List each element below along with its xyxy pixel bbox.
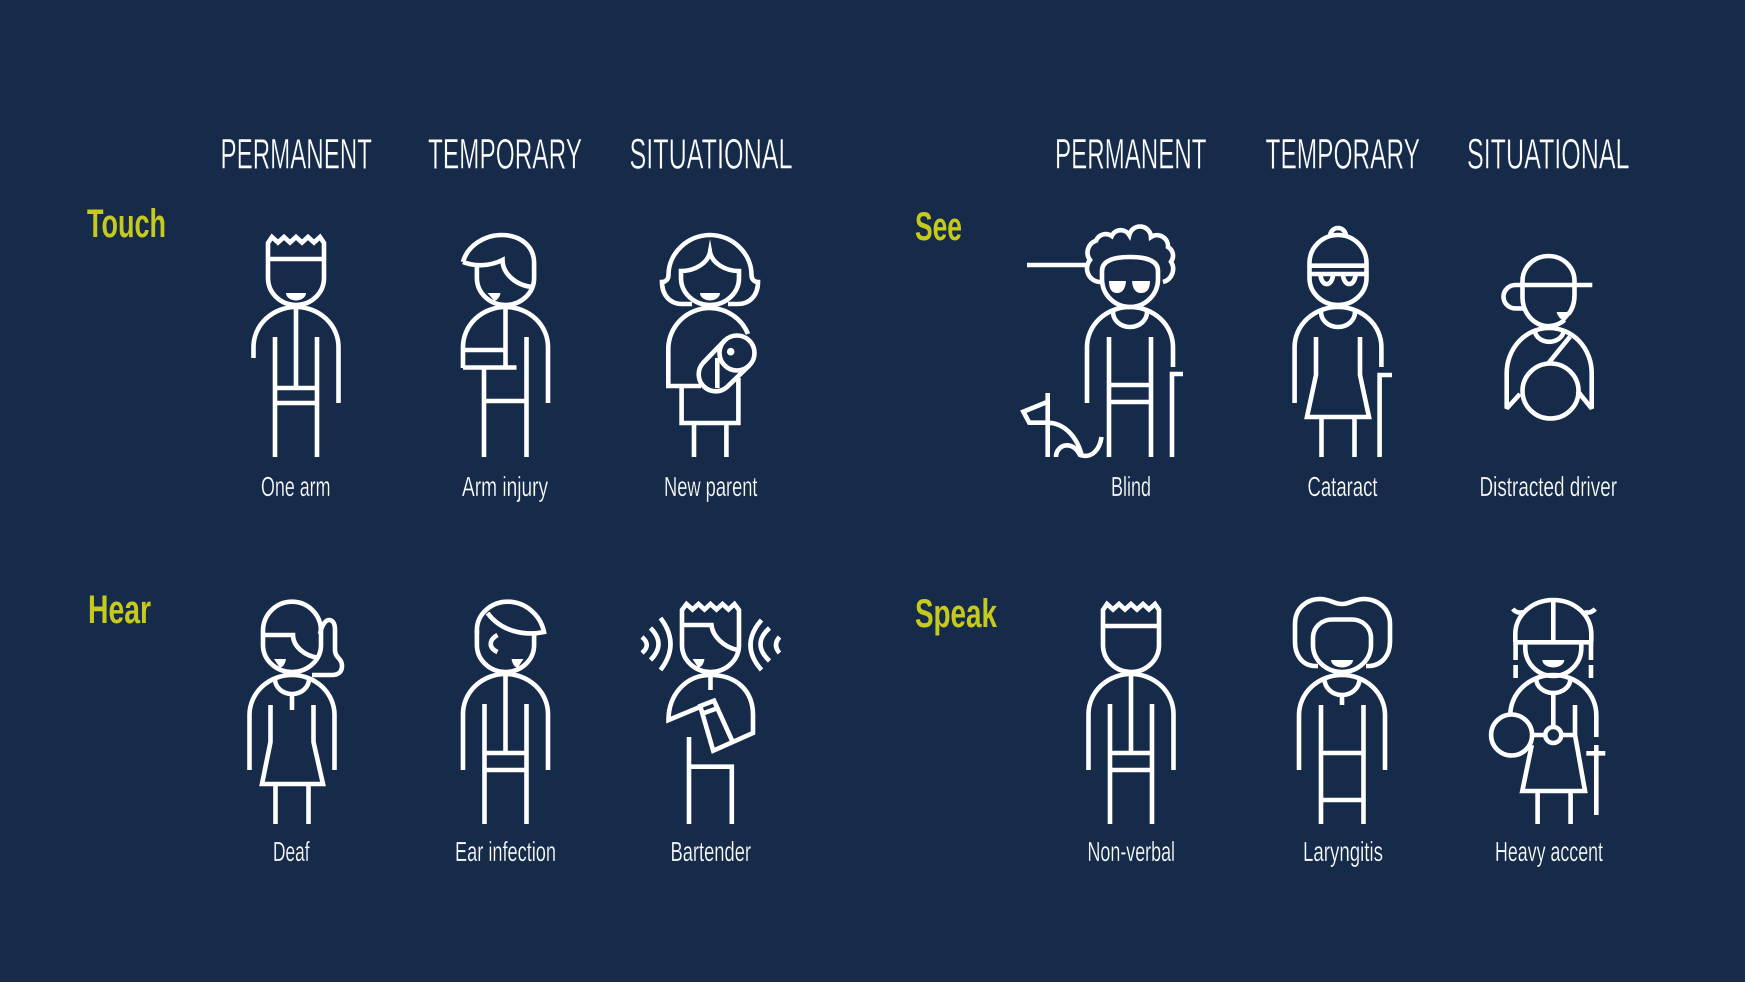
panel: hear xyxy=(88,588,780,867)
label: arm injury: Arm injury xyxy=(462,471,548,502)
icon: deaf figure xyxy=(250,602,342,824)
icon: one arm figure xyxy=(254,237,338,457)
icon: bartender figure with sound waves xyxy=(642,604,780,824)
header: temporary: TEMPORARY xyxy=(428,130,582,178)
icon: laryngitis figure xyxy=(1295,599,1390,824)
header: situational: SITUATIONAL xyxy=(1467,130,1630,178)
icon: blind figure with cane and dog xyxy=(1023,227,1183,457)
header: situational: SITUATIONAL xyxy=(630,130,792,178)
icon: arm injury figure xyxy=(463,235,548,457)
label: laryngitis: Laryngitis xyxy=(1303,836,1383,867)
icon: distracted driver figure xyxy=(1504,256,1592,418)
label: bartender: Bartender xyxy=(670,836,751,867)
icon: heavy accent figure with shield and sword xyxy=(1491,600,1605,824)
icon: non-verbal figure xyxy=(1088,604,1174,824)
panel: touch xyxy=(87,202,758,502)
heading: see: See xyxy=(915,205,962,249)
label: distracted driver: Distracted driver xyxy=(1480,471,1617,502)
panel: see xyxy=(915,205,1617,502)
column headers: left group xyxy=(220,130,792,178)
icon: new parent figure xyxy=(662,235,758,457)
heading: hear: Hear xyxy=(88,588,151,632)
icon: ear infection figure xyxy=(463,602,548,824)
header: permanent: PERMANENT xyxy=(1055,130,1206,178)
icon: cataract figure with cane xyxy=(1295,228,1392,457)
panel: speak xyxy=(915,592,1605,867)
label: cataract: Cataract xyxy=(1308,471,1378,502)
column headers: right group xyxy=(1055,130,1630,178)
heading: speak: Speak xyxy=(915,592,998,636)
label: heavy accent: Heavy accent xyxy=(1495,836,1603,867)
heading: touch: Touch xyxy=(87,202,166,246)
header: temporary: TEMPORARY xyxy=(1266,130,1420,178)
label: new parent: New parent xyxy=(664,471,758,502)
label: ear infection: Ear infection xyxy=(455,836,556,867)
label: blind: Blind xyxy=(1111,471,1151,502)
label: deaf: Deaf xyxy=(273,836,310,867)
label: non-verbal: Non-verbal xyxy=(1088,836,1175,867)
label: one arm: One arm xyxy=(261,471,330,502)
header: permanent: PERMANENT xyxy=(220,130,372,178)
